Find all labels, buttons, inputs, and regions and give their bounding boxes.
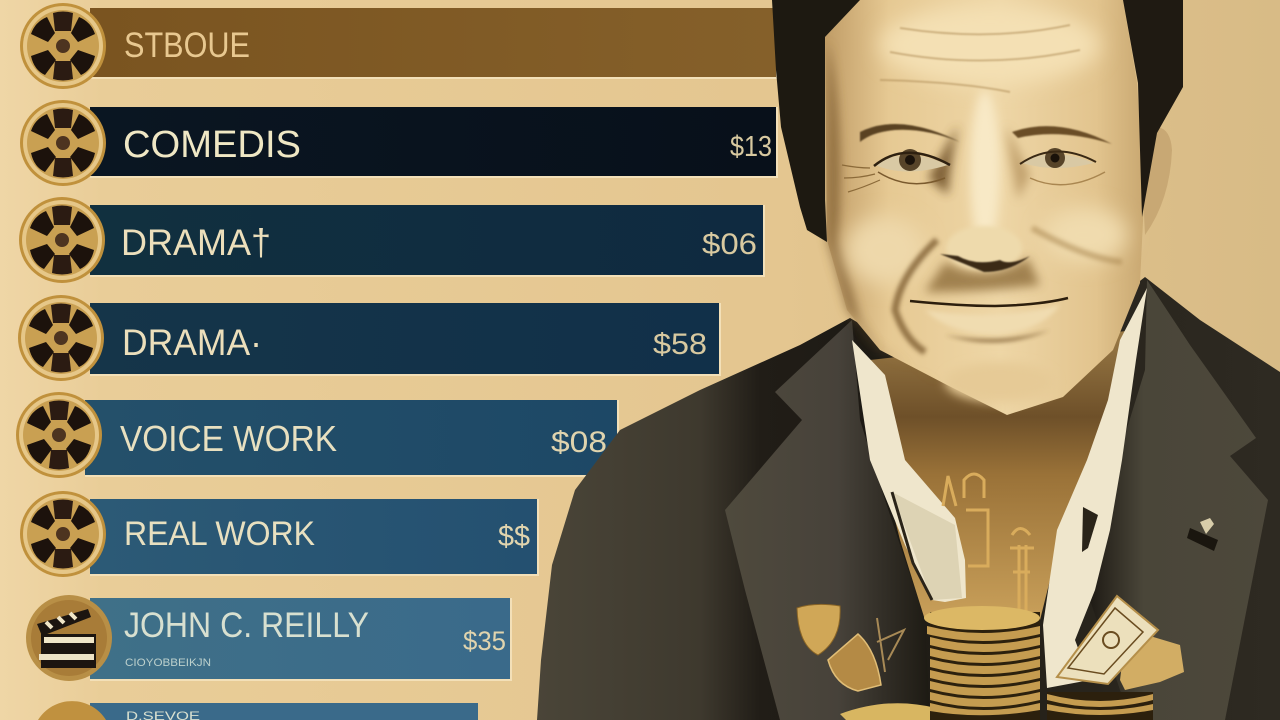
- bar row 6: REAL WORK: [20, 491, 539, 577]
- right ear: [1140, 127, 1172, 235]
- collar fold: [892, 492, 962, 600]
- coin stack: right: [1047, 692, 1153, 720]
- nose: [940, 226, 1030, 272]
- bar row 4: DRAMA: [18, 295, 721, 381]
- face: [825, 0, 1144, 415]
- gold shield right: [828, 634, 881, 691]
- left shirt collar: [852, 340, 966, 602]
- chest skin: [870, 330, 1135, 620]
- bar row 7: JOHN C. REILLY: [26, 595, 512, 681]
- bar row 5: VOICE WORK: [16, 392, 619, 478]
- bar row 3: DRAMA: DRAMA†: [121, 222, 271, 263]
- left eye and brow: [842, 124, 960, 192]
- bar row 1: STBOUE: [20, 3, 778, 89]
- bar row 8: cropped label: [38, 701, 478, 720]
- gold roll: [1120, 636, 1184, 690]
- gold dish: [840, 703, 936, 720]
- icon: film reel 5: [16, 392, 102, 478]
- icon: film reel 3: [19, 197, 105, 283]
- hair right: [1123, 0, 1183, 217]
- facial shading: [827, 5, 1127, 410]
- bar row 3: DRAMA: [19, 197, 765, 283]
- bar row 6: REAL WORK: $$: [498, 520, 530, 553]
- banknote: [1057, 596, 1158, 684]
- hair left: [772, 0, 860, 242]
- icon: film reel 2: [20, 100, 106, 186]
- gold shield left: [797, 604, 840, 655]
- icon: film reel 1: [20, 3, 106, 89]
- icon: film reel 4: [18, 295, 104, 381]
- bar row 2: COMEDIS: [20, 100, 778, 186]
- bar row 6: REAL WORK: REAL WORK: [124, 515, 315, 553]
- mouth: [910, 298, 1068, 306]
- coin stack: main: [924, 606, 1040, 720]
- gold check mark: [877, 618, 904, 672]
- bar row 7: JOHN C. REILLY: JOHN C. REILLY: [124, 606, 369, 645]
- forehead wrinkles: [880, 25, 1080, 92]
- bar row 2: COMEDIS: $13: [730, 131, 772, 163]
- jacket: [537, 277, 1280, 720]
- bar row 5: VOICE WORK: VOICE WORK: [120, 418, 337, 459]
- left lapel: [725, 320, 930, 720]
- icon: film reel 8: [38, 701, 106, 720]
- bar chart: earnings by category: [16, 3, 778, 720]
- right lapel: [1090, 280, 1268, 720]
- bar row 7: JOHN C. REILLY: CIOYOBBEIKJN: [125, 657, 211, 669]
- gold figures on chest: [943, 474, 1034, 612]
- right shirt collar: [1043, 288, 1147, 688]
- bar row 3: DRAMA: $06: [702, 228, 757, 261]
- portrait: smiling man in suit: [537, 0, 1280, 720]
- icon: clapperboard: [26, 595, 112, 681]
- lapel pin: [1187, 518, 1218, 551]
- icon: film reel 6: [20, 491, 106, 577]
- bar row 4: DRAMA: $58: [653, 328, 707, 361]
- bar row 2: COMEDIS: COMEDIS: [123, 124, 301, 166]
- right eye and brow: [1012, 126, 1112, 185]
- bar row 1: STBOUE: STBOUE: [124, 26, 250, 65]
- bar row 4: DRAMA: DRAMA·: [122, 322, 262, 363]
- bar row 5: VOICE WORK: $08: [551, 426, 607, 459]
- bar row 7: JOHN C. REILLY: $35: [463, 626, 506, 656]
